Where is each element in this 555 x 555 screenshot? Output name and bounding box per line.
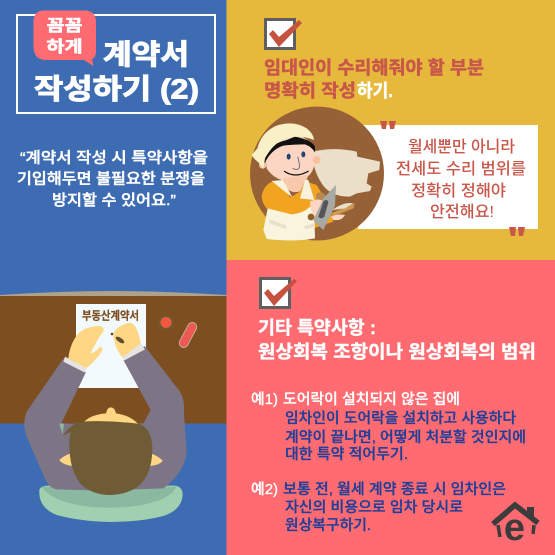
heading: other special terms: 기타 특약사항 :: [258, 318, 376, 338]
panel: blue left background: [0, 0, 226, 555]
left cuff: [63, 357, 87, 373]
board and hands: [308, 192, 355, 220]
heading: landlord repairs: 하기.: [357, 81, 393, 101]
example two text: 자신의 비용으로 임차 당시로: [285, 499, 463, 516]
right ear: [150, 453, 163, 466]
title frame: [17, 15, 215, 113]
example one text: 도어락이 설치되지 않은 집에: [283, 391, 460, 408]
neck: [283, 175, 308, 192]
heading: landlord repairs: 임대인이 수리해줘야 할 부분: [264, 58, 484, 78]
contract paper: 부동산계약서: [82, 308, 139, 322]
sweater body and arms: [24, 346, 187, 491]
orange shirt: [262, 181, 333, 228]
plaster smear: [313, 149, 380, 197]
example one text: 임차인이 도어락을 설치하고 사용하다: [285, 410, 516, 427]
example one text: 예1): [251, 391, 278, 408]
example one text: 계약이 끝나면, 어떻게 처분할 것인지에: [285, 429, 526, 446]
intro quote text: “계약서 작성 시 특약사항을: [20, 150, 208, 166]
shirt collar left: [272, 180, 292, 198]
trowel: [313, 185, 336, 230]
callout closing quote mark: [509, 227, 525, 236]
illustration: person signing a contract at a desk: [0, 291, 226, 522]
intro quote text: 기입해두면 불필요한 분쟁을: [17, 170, 205, 188]
panel: yellow top right background: [226, 0, 555, 260]
hair: [63, 421, 152, 495]
headband: [252, 123, 314, 169]
example two text: 예2): [251, 481, 278, 498]
example two text: 원상복구하기.: [285, 517, 371, 534]
left ear: [59, 453, 72, 466]
callout text: 정확히 정해야: [411, 182, 506, 200]
callout text: 안전해요!: [430, 203, 494, 221]
eraser: [178, 321, 198, 349]
title block: [17, 10, 215, 113]
shirt collar right: [300, 180, 314, 200]
checkbox icon: yellow panel: [266, 20, 302, 48]
right cuff: [123, 343, 145, 361]
example one text: 대한 특약 적어두기.: [285, 446, 408, 463]
example one text: [251, 391, 526, 463]
callout text: 월세뿐만 아니라: [408, 138, 515, 156]
title badge: speech bubble: [34, 10, 96, 66]
callout open quote mark: [380, 121, 396, 129]
callout text: 전세도 수리 범위를: [396, 160, 526, 178]
head and nose: [80, 407, 140, 427]
illustration: plasterer worker: [250, 106, 384, 241]
intro quote text: 방지할 수 있어요.”: [52, 192, 176, 209]
pen: [111, 333, 125, 345]
logo: house with letter e: e: [504, 507, 525, 549]
contract paper: [76, 304, 146, 388]
right hand: [113, 323, 141, 358]
apron: [263, 207, 315, 241]
logo: house with letter e: [493, 505, 538, 549]
title line two: 작성하기 (2): [34, 74, 199, 104]
collar sliver beside hair: [59, 424, 64, 435]
white callout box: [358, 125, 538, 229]
brown circle backdrop: [250, 106, 384, 240]
desk: [0, 291, 226, 424]
example two text: [251, 481, 506, 534]
heading: landlord repairs: [264, 58, 484, 101]
title badge: speech bubble: 꼼꼼: [46, 18, 83, 35]
checkbox icon: pink panel: [260, 278, 297, 308]
title line one: 계약서: [103, 39, 189, 70]
panel: pink bottom right background: [226, 260, 555, 555]
example two text: 보통 전, 월세 계약 종료 시 임차인은: [283, 481, 506, 498]
heading: other special terms: 원상회복 조항이나 원상회복의 범위: [258, 342, 536, 362]
face: [259, 133, 321, 182]
callout text: [396, 138, 526, 221]
heading: landlord repairs: 명확히 작성: [264, 81, 356, 101]
title badge: speech bubble: 하게: [46, 38, 82, 56]
left hand: [68, 326, 104, 368]
stamp ink pad: [158, 315, 174, 330]
intro quote text: [17, 150, 208, 209]
heading: other special terms: [258, 318, 536, 362]
cushion: [39, 486, 183, 522]
